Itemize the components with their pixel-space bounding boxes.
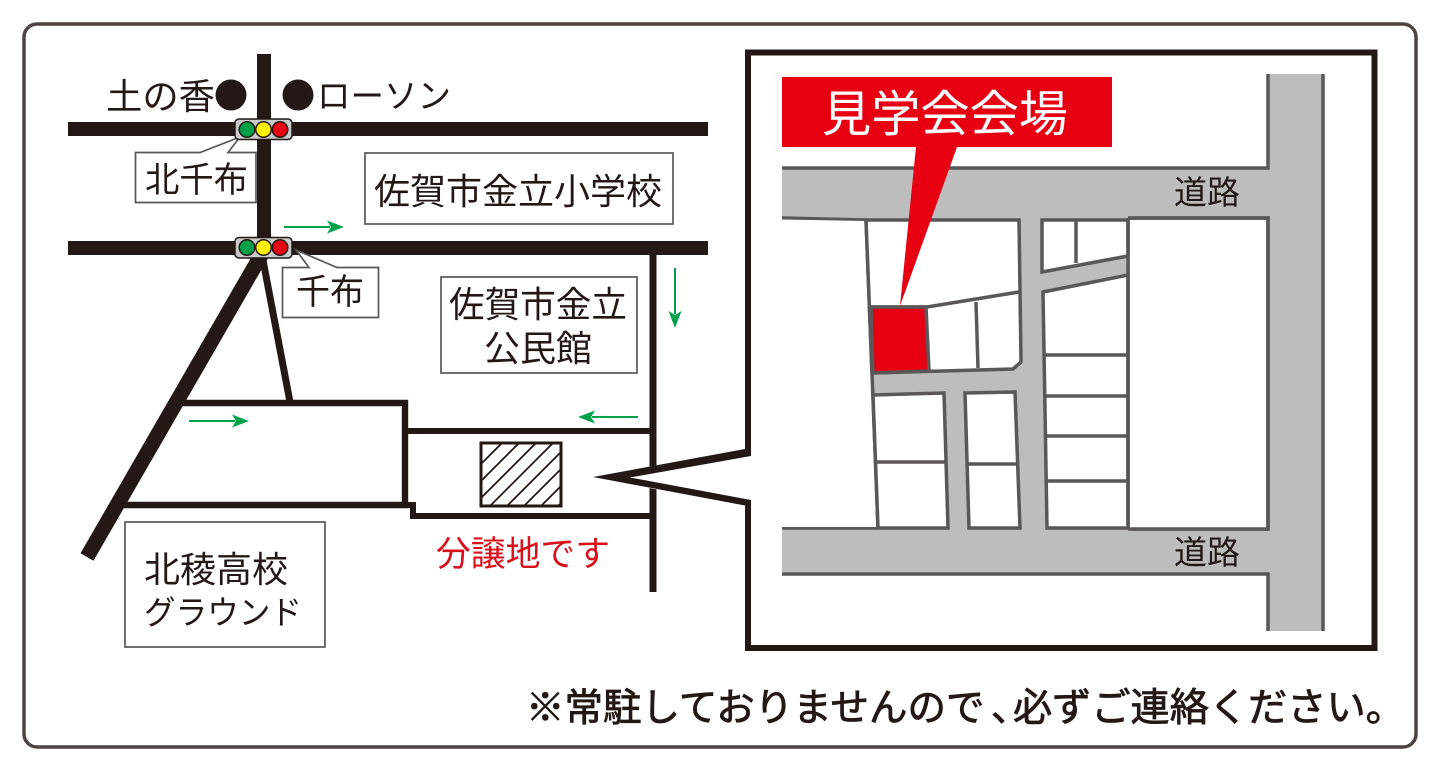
callout frame with pointer xyxy=(593,52,1376,648)
panel: detail map callout xyxy=(593,50,1378,651)
roads and lots xyxy=(782,74,1323,631)
lot block: lower centre xyxy=(965,392,1020,528)
roads xyxy=(68,54,708,592)
landmark: 土の香: 土の香 xyxy=(106,76,215,117)
label: 北千布 xyxy=(136,137,256,202)
label: 佐賀市金立小学校 xyxy=(365,153,673,224)
arrow: east in school block xyxy=(189,414,249,428)
label: 北稜高校グラウンド: 北稜高校 xyxy=(144,549,288,590)
arrow: east along 千布 road xyxy=(284,220,344,234)
road label: bottom: 道路 xyxy=(1174,534,1240,571)
label: 佐賀市金立公民館: 公民館 xyxy=(484,328,592,369)
lot block: lower right xyxy=(1043,275,1128,528)
label: 北千布: 北千布 xyxy=(145,161,248,200)
label: 北稜高校グラウンド: グラウンド xyxy=(144,594,302,631)
lot: venue xyxy=(871,307,929,373)
label: 佐賀市金立小学校: 佐賀市金立小学校 xyxy=(374,171,662,212)
white area left of block xyxy=(782,220,878,527)
lot block: upper right xyxy=(1042,220,1128,272)
road surface xyxy=(782,74,1323,631)
label: 千布 xyxy=(282,250,378,318)
arrow: south along side road xyxy=(668,268,682,328)
landmark: ローソン: ローソン xyxy=(317,78,451,116)
lot block: lower left xyxy=(873,393,948,528)
site marker: hatched lot xyxy=(480,442,562,508)
label: 佐賀市金立公民館: 佐賀市金立 xyxy=(449,284,627,325)
label: 佐賀市金立公民館 xyxy=(441,277,637,373)
label: 北稜高校グラウンド xyxy=(125,522,325,647)
traffic light: 北千布 xyxy=(235,119,292,140)
arrow: west toward site xyxy=(578,410,638,424)
note: contact notice: ※常駐しておりませんので xyxy=(526,687,985,730)
label: 千布: 千布 xyxy=(296,273,364,312)
road label: top: 道路 xyxy=(1174,174,1240,211)
lot block: upper xyxy=(866,220,1021,373)
venue flag: 見学会会場: 見学会会場 xyxy=(822,88,1068,142)
panel: area road map xyxy=(68,54,708,647)
note: contact notice: 、 xyxy=(991,687,1030,730)
note: contact notice: 必ずご連絡ください。 xyxy=(1013,687,1405,730)
caption: 分譲地です: 分譲地です xyxy=(436,535,610,574)
traffic light: 千布 xyxy=(235,238,292,258)
venue flag: 見学会会場 xyxy=(782,77,1112,306)
